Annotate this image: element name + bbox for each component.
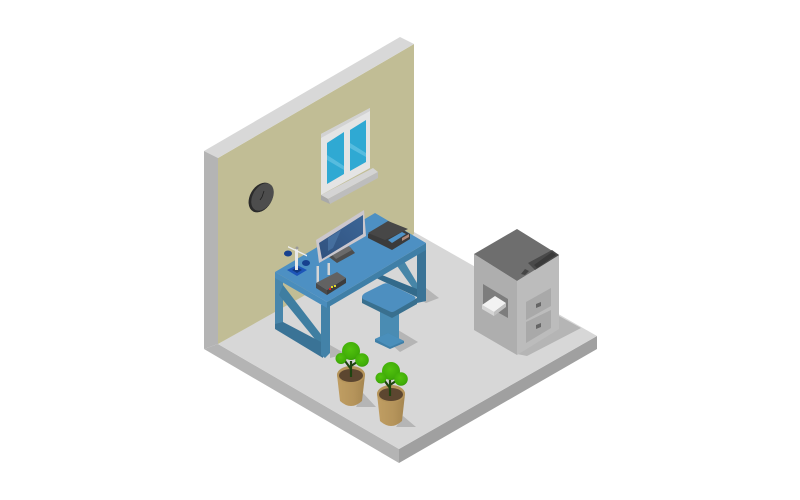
copier paper opening: [482, 284, 508, 318]
desk front leg: [321, 302, 330, 358]
copier control panel: [521, 250, 559, 275]
window: [321, 108, 378, 204]
back wall: [204, 37, 414, 349]
window panes: [327, 120, 366, 184]
monitor: [316, 210, 366, 263]
desk left leg and braces: [275, 277, 323, 358]
window sill: [321, 168, 378, 204]
desk: [275, 213, 426, 358]
floor slab: [204, 232, 597, 463]
balance scale: [284, 246, 310, 276]
router: [316, 263, 346, 295]
desk top: [275, 213, 426, 302]
desk rear legs and braces: [376, 246, 426, 303]
wall clock: [243, 178, 279, 217]
plant pot two: [376, 362, 408, 426]
scanner: [368, 221, 410, 250]
copier drawers: [526, 288, 551, 343]
floor shadows: [330, 288, 581, 427]
stool: [362, 283, 417, 349]
copier: [474, 229, 559, 355]
plant pot one: [336, 342, 369, 406]
